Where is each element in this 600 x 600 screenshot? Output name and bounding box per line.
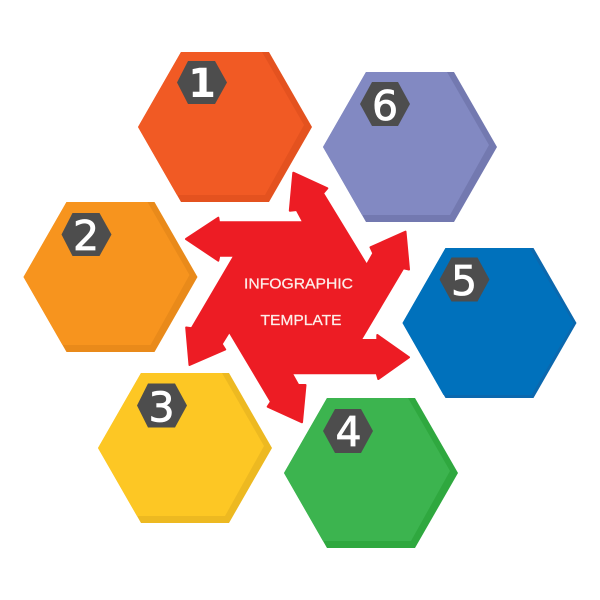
badge 5 — [440, 257, 490, 305]
badge 1: 1 — [188, 61, 216, 107]
panel: hexagon 4 — [284, 398, 458, 548]
badge 5: 5 — [451, 257, 477, 305]
badge 6 — [360, 82, 410, 130]
label: infographic: INFOGRAPHIC — [244, 276, 353, 292]
panel: hexagon 3 — [98, 373, 272, 523]
badge 3: 3 — [148, 384, 175, 432]
badge 2: 2 — [73, 212, 99, 260]
panel: hexagon 5 — [402, 248, 576, 398]
badge 6: 6 — [372, 82, 398, 130]
badge 3 — [137, 384, 187, 432]
center: red six-arrow star — [186, 173, 409, 422]
badge 4: 4 — [335, 408, 362, 456]
label: template: TEMPLATE — [260, 313, 342, 329]
badge 4 — [323, 408, 373, 456]
panel: hexagon 1 — [138, 52, 312, 202]
panel: hexagon 2 — [24, 202, 198, 352]
panel: hexagon 6 — [323, 72, 497, 222]
badge 1 — [177, 61, 227, 107]
badge 2 — [62, 212, 112, 260]
